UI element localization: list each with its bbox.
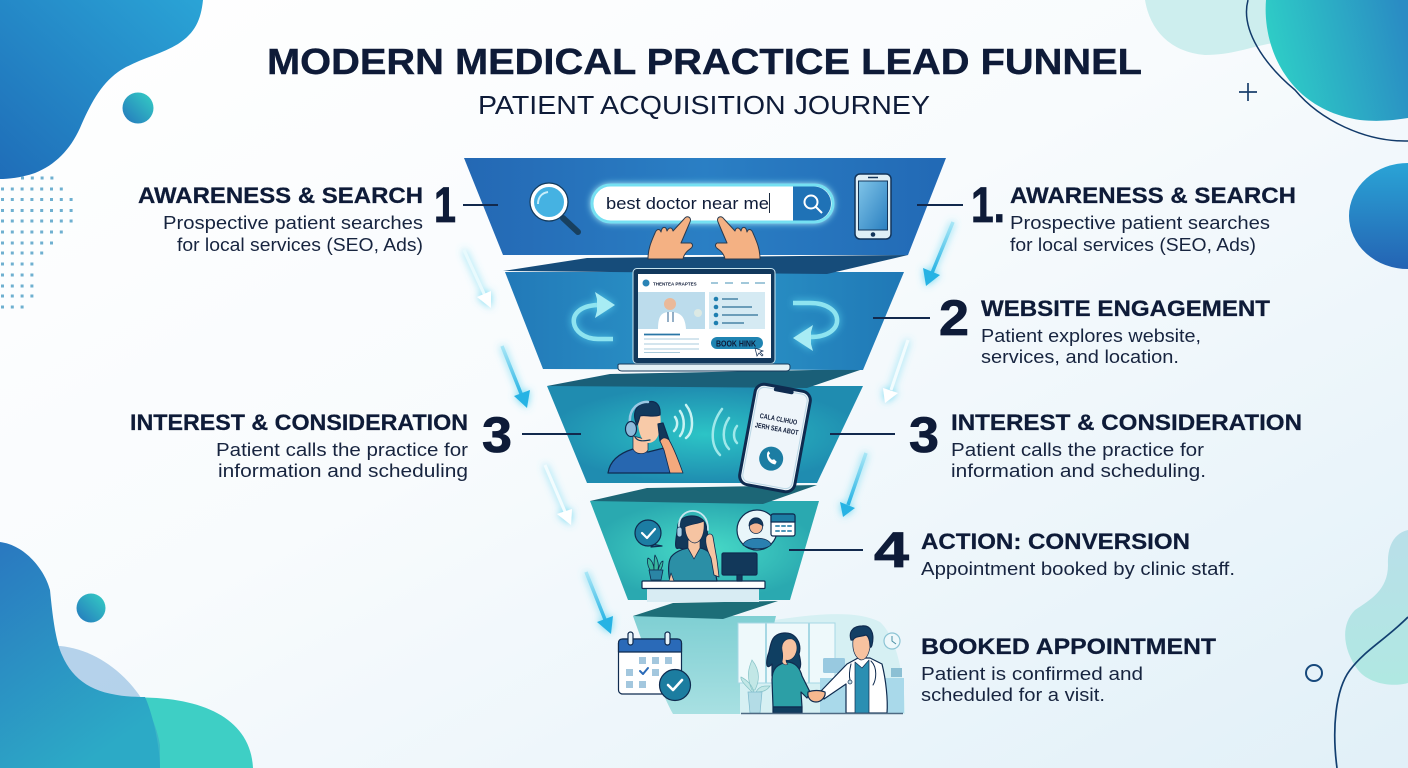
plant — [741, 660, 770, 713]
curved arrow left — [574, 292, 615, 339]
doctor — [821, 626, 887, 713]
right label: website engagement: Patient explores website, — [981, 325, 1201, 346]
subtitle: PATIENT ACQUISITION JOURNEY — [478, 90, 930, 120]
search bar — [592, 185, 833, 222]
right label: action conversion — [921, 529, 1235, 579]
handshake — [808, 690, 825, 702]
connector 1 left — [463, 204, 498, 206]
monitor — [722, 553, 757, 581]
funnel stage 4: action — [590, 485, 819, 602]
scene: clinic room — [738, 623, 904, 714]
circle accent: bottom left — [76, 594, 106, 622]
arrow: right 2 — [883, 340, 908, 403]
funnel stage 3: interest — [547, 369, 863, 493]
left label: interest and consideration: INTEREST & CONSIDERATION — [130, 410, 468, 435]
arrow: right 1 — [923, 222, 953, 286]
connector 4 — [789, 549, 863, 551]
dot grid — [1, 178, 74, 307]
caller with headset — [608, 402, 683, 473]
icon: wall clock — [884, 633, 900, 649]
right label: website engagement — [981, 296, 1271, 367]
funnel stage 1: awareness — [464, 158, 946, 259]
laptop: THENTEA PRAPTES — [653, 282, 697, 286]
connector 1 right — [917, 204, 963, 206]
blobs: bottom left — [0, 542, 253, 768]
left label: interest and consideration: information and scheduling — [218, 460, 468, 481]
funnel stage 2: website engagement — [503, 255, 908, 371]
left label: awareness and search: AWARENESS & SEARCH — [138, 183, 423, 208]
number 3 left: 3 — [482, 407, 512, 463]
arrow: left 2 — [502, 346, 530, 408]
sound waves left — [674, 405, 692, 438]
left label: interest and consideration — [130, 410, 468, 481]
sound waves right — [713, 409, 737, 455]
blobs: top right — [1145, 0, 1408, 141]
right label: awareness and search — [1010, 183, 1296, 255]
right label: booked appointment: scheduled for a visit. — [921, 684, 1105, 705]
connector 3 right — [830, 433, 895, 435]
avatar and calendar — [737, 510, 795, 550]
left label: interest and consideration: Patient calls the practice for — [216, 439, 468, 460]
desk — [642, 581, 765, 602]
receptionist — [669, 511, 719, 581]
icon: calendar — [618, 632, 690, 700]
funnel base — [633, 616, 776, 714]
right label: awareness and search: Prospective patient searches — [1010, 212, 1270, 233]
icon: right hand — [715, 217, 760, 259]
icon: ring — [1306, 665, 1322, 681]
arrow: right 3 — [840, 453, 866, 517]
right label: booked appointment: BOOKED APPOINTMENT — [921, 634, 1217, 659]
right label: website engagement: services, and location. — [981, 346, 1179, 367]
book now button — [711, 337, 763, 356]
book now button: BOOK HINK — [716, 340, 756, 348]
flap — [590, 485, 817, 504]
right label: action conversion: ACTION: CONVERSION — [921, 529, 1190, 554]
blob: right circle — [1349, 163, 1408, 269]
smartphone: call clinic: JERH SEA ABOT — [754, 422, 799, 437]
number 1 right: 1. — [971, 177, 1005, 233]
smartphone: call clinic — [738, 383, 812, 493]
connector 3 left — [522, 433, 581, 435]
icon: magnifying glass — [530, 183, 578, 232]
right label: interest and consideration — [951, 410, 1302, 481]
number 4: 4 — [874, 522, 909, 578]
right label: interest and consideration: information and scheduling. — [951, 460, 1206, 481]
arrow: left 4 — [586, 572, 613, 634]
left label: awareness and search — [138, 183, 423, 255]
number 1 left: 1 — [434, 177, 456, 233]
number 3 right: 3 — [909, 407, 939, 463]
search bar: best doctor near me — [606, 195, 769, 213]
right label: action conversion: Appointment booked by clinic staff. — [921, 558, 1235, 579]
plant — [647, 555, 663, 580]
right label: awareness and search: for local services (SEO, Ads) — [1010, 234, 1256, 255]
connector 2 — [873, 317, 930, 319]
right label: booked appointment: Patient is confirmed and — [921, 663, 1143, 684]
title: MODERN MEDICAL PRACTICE LEAD FUNNEL — [267, 41, 1142, 82]
smartphone: call clinic: CALA CLIHUO — [759, 413, 798, 427]
curved arrow right — [793, 303, 837, 351]
right label: interest and consideration: Patient calls the practice for — [951, 439, 1204, 460]
blob: top left — [0, 0, 203, 179]
icon: left hand — [648, 217, 693, 259]
right label: awareness and search: AWARENESS & SEARCH — [1010, 183, 1296, 208]
blob: bottom right — [1335, 530, 1408, 768]
woman patient — [767, 633, 810, 713]
left label: awareness and search: for local services (SEO, Ads) — [177, 234, 423, 255]
laptop — [618, 268, 790, 371]
website list panel — [709, 292, 765, 329]
website hero photo — [638, 292, 705, 329]
left label: awareness and search: Prospective patient searches — [163, 212, 423, 233]
flap — [503, 255, 908, 274]
icon: plus — [1239, 83, 1257, 101]
chat check bubble — [635, 520, 662, 547]
number 2: 2 — [939, 290, 969, 346]
right label: booked appointment — [921, 634, 1217, 705]
arrow: left 3 — [545, 465, 572, 525]
right label: website engagement: WEBSITE ENGAGEMENT — [981, 296, 1271, 321]
circle accent: top left — [122, 92, 154, 124]
funnel stage 5: booked appointment — [130, 158, 1302, 714]
arrow: left 1 — [464, 250, 491, 308]
flap — [633, 601, 778, 619]
scene backdrop — [738, 614, 905, 714]
flap — [547, 369, 863, 388]
icon: smartphone — [855, 174, 891, 239]
right label: interest and consideration: INTEREST & CONSIDERATION — [951, 410, 1302, 435]
